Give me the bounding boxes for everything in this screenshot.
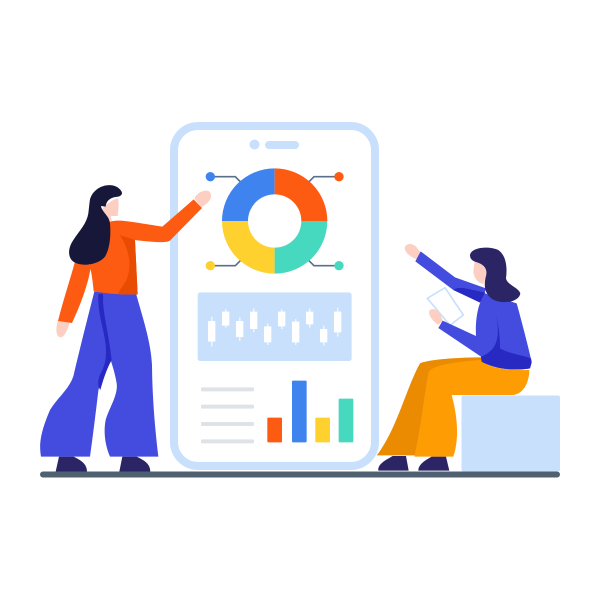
upper body [58, 185, 211, 323]
trousers [40, 292, 158, 457]
left sleeve [58, 262, 91, 323]
seat box [462, 396, 560, 472]
face and neck [102, 198, 119, 222]
ground line [40, 472, 560, 478]
torso and lower sleeve [438, 293, 532, 369]
lower body [40, 292, 158, 472]
connector lines [210, 177, 339, 266]
phone speaker and camera [250, 140, 299, 150]
hair [69, 185, 122, 265]
upper body [405, 244, 532, 369]
torso and raised sleeve [90, 199, 202, 294]
text placeholder lines [201, 387, 254, 443]
upper hand [405, 244, 421, 259]
raised sleeve [415, 251, 486, 303]
lower body [377, 357, 529, 471]
seated woman [377, 244, 532, 471]
trousers back leg [377, 357, 483, 455]
torso shadow [481, 311, 532, 369]
candlestick chart panel [198, 292, 352, 361]
hair [470, 248, 520, 302]
lower hand [429, 309, 443, 325]
donut chart with connectors [206, 168, 344, 274]
donut segments [222, 168, 327, 274]
left hand [56, 321, 70, 337]
bar chart [267, 381, 353, 442]
phone frame [174, 126, 375, 466]
tablet [427, 288, 463, 325]
shoes [378, 456, 449, 471]
sleeve shadow [453, 288, 485, 303]
trouser shadow [98, 294, 112, 390]
connector dots [206, 172, 344, 270]
candlesticks [208, 308, 341, 347]
raised hand [194, 191, 211, 207]
trousers front leg and thigh [414, 360, 529, 457]
face [473, 261, 487, 284]
standing woman [40, 185, 211, 472]
shoes [56, 457, 150, 472]
torso shadow [118, 235, 138, 294]
